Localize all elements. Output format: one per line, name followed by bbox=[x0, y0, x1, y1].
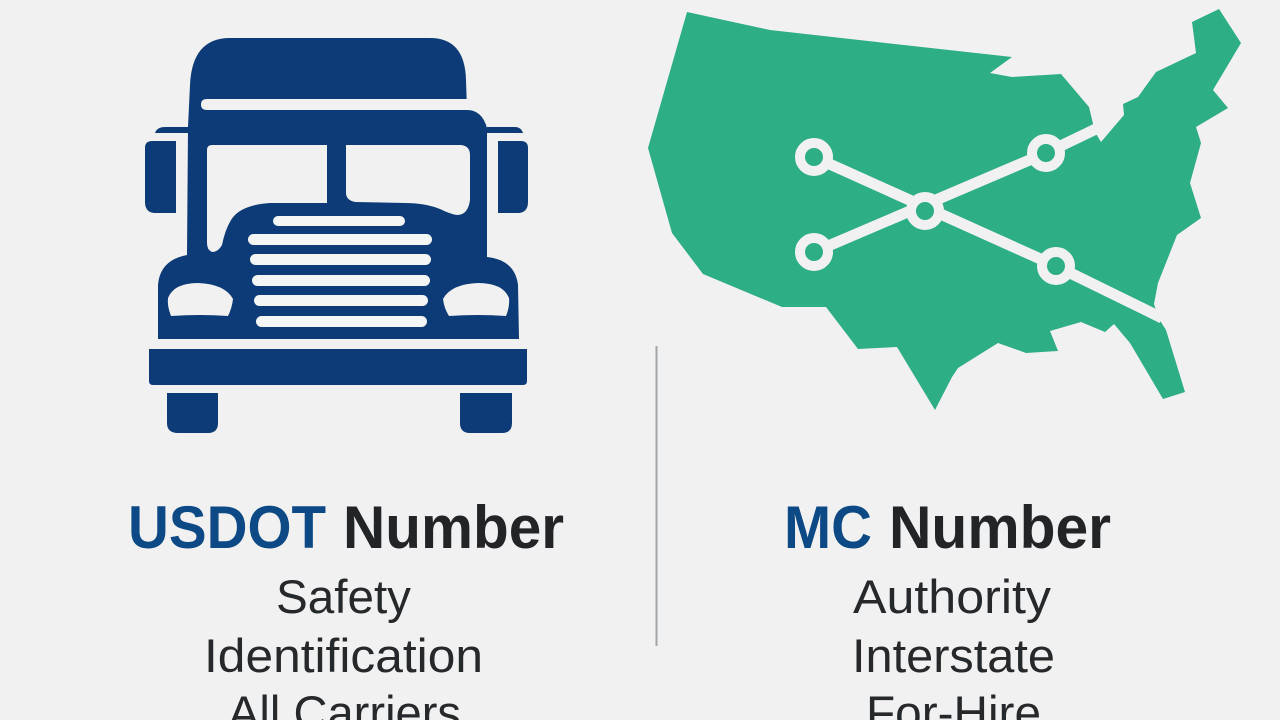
list: USDOT attributes bbox=[204, 570, 483, 720]
left windshield bbox=[207, 145, 327, 252]
right mirror arm bbox=[487, 127, 523, 133]
list: MC attributes: Interstate bbox=[852, 629, 1055, 682]
right wheel bbox=[460, 393, 512, 433]
heading: USDOT Number bbox=[128, 494, 564, 561]
heading: MC Number: Number bbox=[889, 494, 1111, 561]
right windshield bbox=[346, 145, 470, 215]
heading: USDOT Number: Number bbox=[343, 494, 564, 561]
heading: MC Number: MC bbox=[784, 494, 872, 561]
icon: US map with routes bbox=[648, 9, 1241, 410]
left mirror arm bbox=[155, 127, 188, 133]
route nodes bbox=[800, 139, 1070, 280]
bumper bbox=[149, 349, 527, 385]
list: MC attributes bbox=[852, 570, 1055, 720]
list: USDOT attributes: Identification bbox=[204, 629, 483, 682]
left headlight bbox=[168, 283, 233, 316]
heading: MC Number bbox=[784, 494, 1111, 561]
truck cab and hood bbox=[158, 38, 519, 339]
right headlight bbox=[443, 283, 509, 316]
heading: USDOT Number: USDOT bbox=[128, 494, 326, 561]
left wheel bbox=[167, 393, 218, 433]
list: MC attributes: Authority bbox=[853, 570, 1052, 623]
list: USDOT attributes: Safety bbox=[276, 570, 411, 623]
map silhouette bbox=[648, 9, 1241, 410]
route lines bbox=[814, 127, 1162, 318]
right mirror bbox=[498, 141, 528, 213]
grille bars bbox=[248, 216, 432, 327]
roof stripe bbox=[201, 99, 468, 110]
divider bbox=[656, 346, 658, 646]
left mirror bbox=[145, 141, 176, 213]
icon: truck front bbox=[145, 38, 528, 433]
